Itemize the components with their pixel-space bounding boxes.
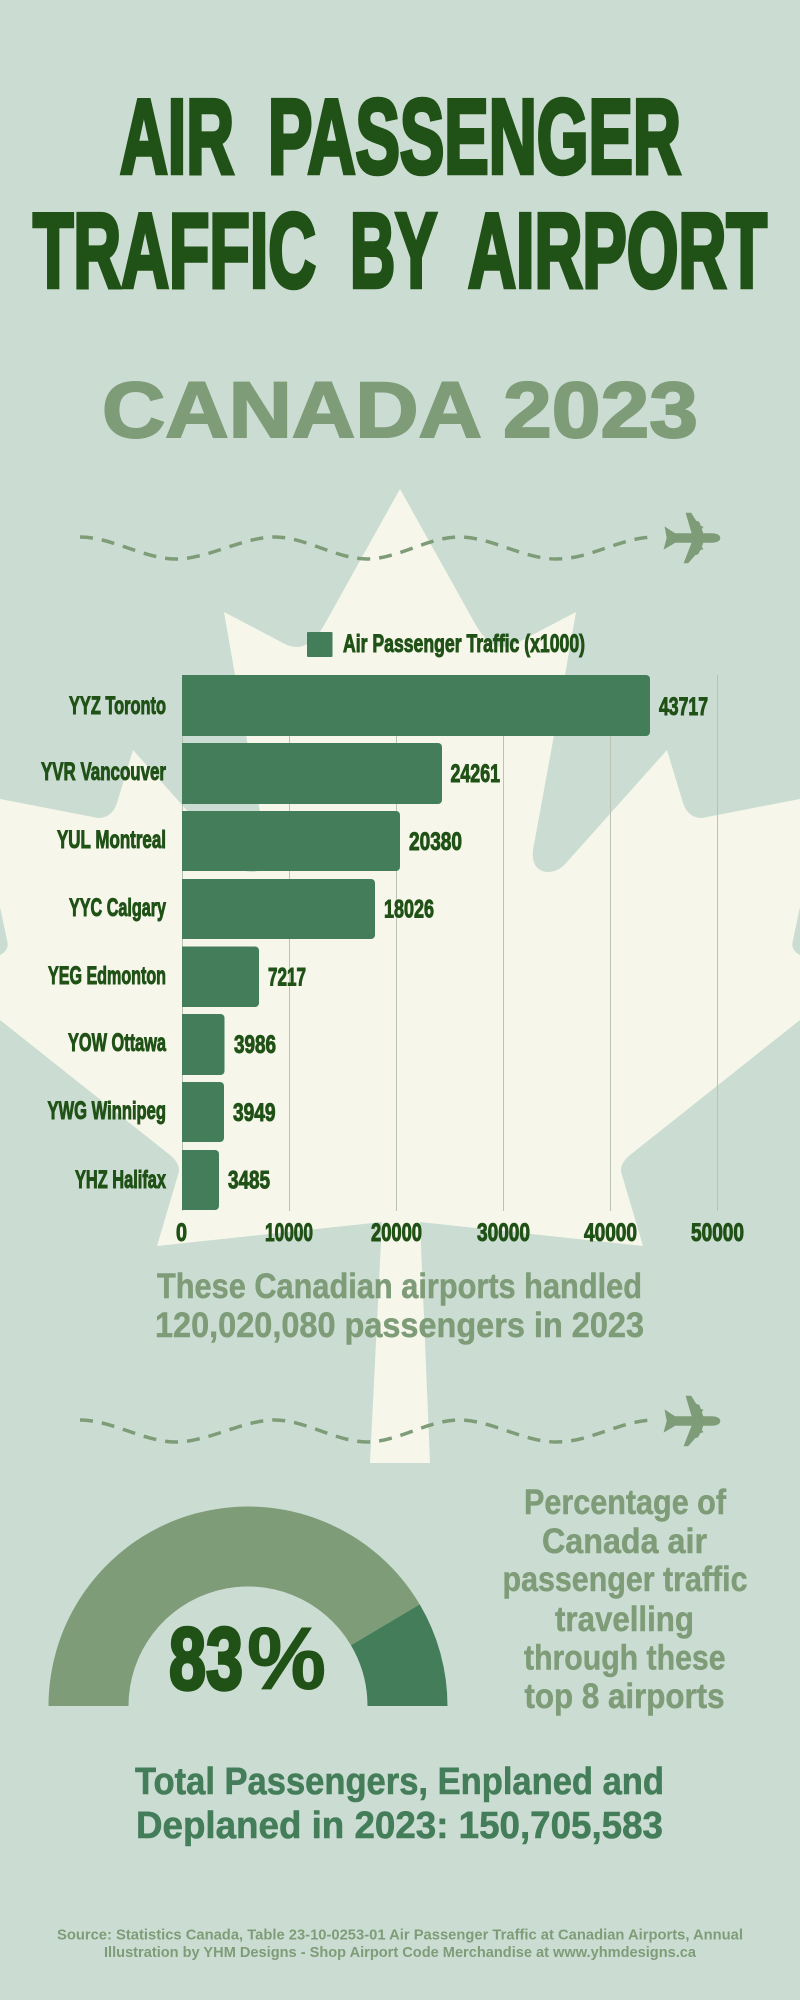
gauge value: %: [247, 1609, 326, 1708]
bar values: 3485: [228, 1166, 270, 1194]
bar values: [228, 693, 708, 1194]
title: BY: [350, 192, 437, 310]
description: percentage of traffic: travelling: [555, 1600, 694, 1639]
description: percentage of traffic: Percentage of: [524, 1483, 726, 1522]
total passengers statement: Total Passengers, Enplaned and: [135, 1761, 664, 1803]
bar values: 3949: [233, 1099, 276, 1127]
airport labels: [41, 692, 167, 1194]
bar values: 18026: [384, 896, 434, 924]
flight path with plane: bottom: [80, 1396, 720, 1446]
x axis labels: 40000: [584, 1219, 637, 1247]
source note: Source: Statistics Canada, Table 23-10-0253-01 Air Passenger Traffic at Canadian Airports, Annual: [57, 1926, 743, 1944]
maple leaf background: [0, 489, 800, 1463]
statement: airports total: 120,020,080 passengers in 2023: [155, 1306, 644, 1345]
description: percentage of traffic: Canada air: [542, 1522, 707, 1561]
title: [33, 78, 767, 310]
airport labels: YEG Edmonton: [48, 962, 166, 990]
x axis labels: 30000: [477, 1219, 530, 1247]
title: TRAFFIC: [33, 192, 316, 310]
airport labels: YHZ Halifax: [75, 1166, 166, 1194]
description: percentage of traffic: top 8 airports: [524, 1677, 724, 1716]
source note: [57, 1926, 743, 1961]
airport labels: YOW Ottawa: [68, 1029, 167, 1057]
airport labels: YWG Winnipeg: [48, 1097, 166, 1125]
description: percentage of traffic: passenger traffic: [502, 1560, 748, 1599]
bars: [182, 675, 650, 1210]
title: AIR: [120, 78, 234, 196]
subtitle: Canada 2023: CANADA 2023: [102, 365, 698, 454]
x axis labels: [176, 1219, 744, 1247]
gauge value: [169, 1609, 326, 1708]
chart legend: [307, 630, 585, 658]
description: percentage of traffic: [502, 1483, 748, 1716]
gridlines: [182, 675, 718, 1211]
source note: Illustration by YHM Designs - Shop Airport Code Merchandise at www.yhmdesigns.ca: [104, 1944, 697, 1961]
x axis labels: 10000: [265, 1219, 313, 1247]
total passengers statement: [135, 1761, 664, 1847]
airport labels: YYC Calgary: [69, 894, 166, 922]
airport labels: YVR Vancouver: [41, 758, 166, 786]
airport labels: YYZ Toronto: [69, 692, 166, 720]
description: percentage of traffic: through these: [524, 1638, 726, 1678]
bar values: 20380: [409, 828, 462, 856]
bar chart: [41, 630, 744, 1247]
statement: airports total: These Canadian airports handled: [157, 1267, 642, 1306]
bar values: 24261: [450, 760, 500, 788]
x axis labels: 20000: [371, 1219, 422, 1247]
bar values: 3986: [234, 1031, 276, 1059]
airport labels: YUL Montreal: [57, 826, 166, 854]
flight path with plane: top: [80, 513, 720, 563]
chart legend: Air Passenger Traffic (x1000): [343, 630, 585, 658]
x axis labels: 0: [176, 1219, 187, 1247]
gauge value: 83: [169, 1609, 243, 1708]
gauge chart: 83%: [48, 1506, 448, 1708]
statement: airports total: [155, 1267, 644, 1345]
bar values: 43717: [659, 693, 708, 721]
x axis labels: 50000: [691, 1219, 744, 1247]
total passengers statement: Deplaned in 2023: 150,705,583: [136, 1805, 663, 1847]
bar values: 7217: [268, 964, 306, 992]
